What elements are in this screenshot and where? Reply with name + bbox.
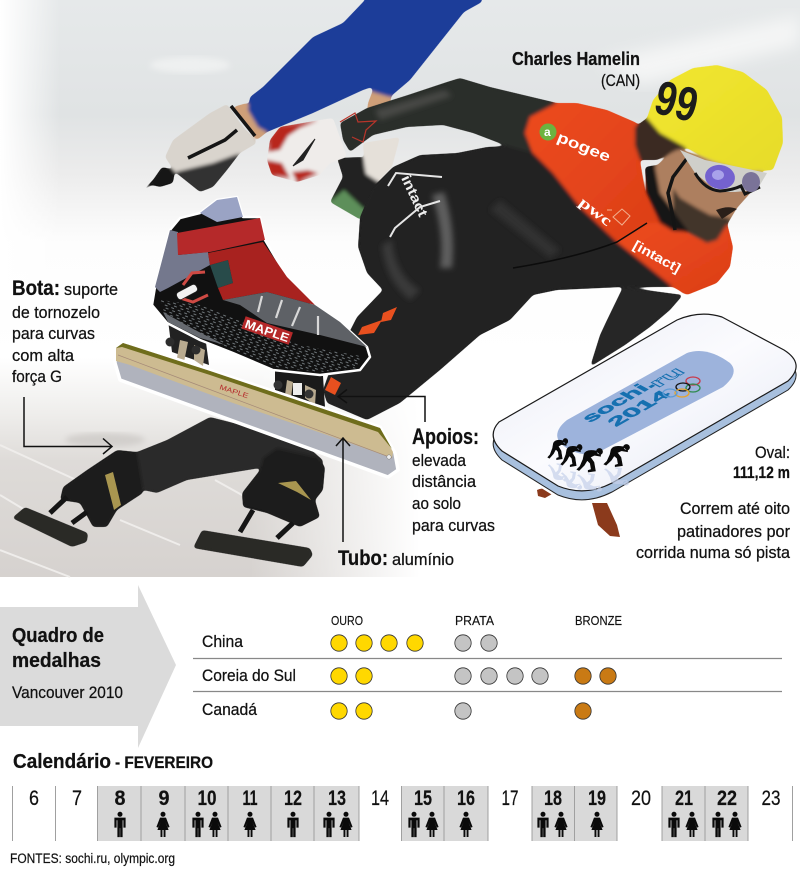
thigh highlights: [375, 90, 560, 300]
text: skaters per race: [636, 499, 791, 562]
sources: FONTES: sochi.ru, olympic.org: [10, 851, 175, 866]
helmet number 99: 99: [650, 71, 703, 133]
country names: China: [202, 632, 243, 651]
Olympic rings: [663, 377, 700, 397]
day numbers: 12: [284, 787, 302, 810]
text: oval length: Oval:: [755, 443, 790, 462]
white boot: [165, 104, 257, 172]
Sochi logo: 2014: [603, 388, 676, 429]
orange lower panel: [617, 223, 733, 295]
rear blade mount: [166, 320, 209, 366]
column headings: PRATA: [455, 613, 494, 628]
maple leaf on sleeve: [340, 113, 376, 142]
sponsor intact thigh: intact: [398, 173, 432, 219]
calendar strip: [12, 786, 792, 841]
gold boot patches: [105, 472, 311, 510]
gray toe top: [223, 292, 367, 347]
column headings: [331, 613, 622, 628]
boot shell: [175, 153, 240, 192]
laces: [258, 296, 318, 335]
column headings: BRONZE: [575, 613, 622, 628]
Sochi logo: [577, 364, 689, 429]
buckle: [175, 272, 208, 302]
nose and mouth: [716, 207, 737, 219]
heading: calendar: Calendário: [13, 751, 111, 773]
arrow: mounts: [338, 390, 425, 422]
day numbers: 14: [371, 787, 389, 810]
inner oval: [557, 351, 734, 454]
day numbers: 18: [544, 787, 562, 810]
hair: [635, 118, 687, 160]
red strap: [177, 218, 265, 255]
goggles: [680, 150, 767, 194]
illustration: speed skate: [115, 197, 398, 477]
left boot: [60, 450, 143, 527]
text: boot: de tornozelo: [12, 303, 100, 322]
neck collar: [645, 165, 690, 232]
column headings: OURO: [331, 613, 363, 628]
sponsor intact chest: [intact]: [631, 238, 683, 276]
text: boot: suporte: [64, 280, 118, 299]
heading: medal table: Vancouver 2010: [12, 683, 123, 702]
lower leg: [137, 417, 325, 493]
rink halo and side: [493, 323, 796, 500]
text: tube: Tubo:: [338, 547, 388, 570]
skater reflections: [548, 463, 629, 492]
red upper: [208, 242, 315, 305]
blade brand: MAPLE: [218, 384, 249, 400]
text: mounts: distância: [412, 472, 477, 491]
day numbers: 16: [457, 787, 475, 810]
torso and thigh: [323, 146, 673, 420]
day numbers: 23: [762, 787, 780, 810]
sponsor apogee: [540, 124, 613, 166]
skater Charles Hamelin in black and orange suit: [323, 65, 783, 420]
ankle skin: [233, 90, 392, 140]
text: mounts: [412, 424, 495, 535]
beard: [673, 188, 730, 243]
text: skaters per race: Correm até oito: [680, 499, 790, 518]
label: athlete name: Charles Hamelin: [512, 49, 640, 69]
medal table: [193, 613, 782, 719]
right blade: [193, 530, 313, 567]
scale texture: [160, 300, 360, 372]
day numbers: 7: [72, 787, 82, 810]
right arm: [590, 287, 683, 367]
helmet: [647, 65, 783, 172]
day numbers: 10: [198, 787, 216, 810]
left blade: [12, 507, 88, 547]
panel: medal table arrow: [0, 585, 176, 748]
lower side gray: [163, 312, 225, 345]
text: mounts: para curvas: [412, 516, 495, 535]
country names: Coreia do Sul: [202, 666, 296, 685]
day numbers: 20: [631, 787, 651, 810]
men and women event icons: [114, 812, 742, 837]
heading: calendar: - FEVEREIRO: [115, 753, 213, 772]
boot body: [152, 197, 370, 375]
sponsor pwc: [576, 195, 630, 230]
far skate under arm: [330, 137, 400, 220]
glove: [267, 118, 347, 182]
day numbers: 21: [675, 787, 693, 810]
heading: calendar: [13, 751, 213, 773]
text: boot: Bota:: [12, 277, 60, 300]
dark window: [210, 260, 233, 288]
text: mounts: Apoios:: [412, 424, 479, 449]
glove mark: [293, 139, 315, 166]
gray tongue: [200, 197, 243, 222]
face: [655, 148, 763, 243]
red suit fragments under rink: [537, 489, 620, 537]
skater silhouettes: [548, 438, 630, 472]
day numbers: 11: [242, 787, 258, 810]
sponsor apogee: a: [544, 125, 551, 139]
chin strap: [668, 157, 688, 230]
silver medals: [455, 635, 548, 719]
Sochi logo: ru: [644, 364, 689, 390]
text: boot: [12, 277, 118, 386]
text: skaters per race: corrida numa só pista: [636, 543, 791, 562]
left arm sleeve: [340, 78, 557, 155]
blue skater leg and white boot: [135, 0, 482, 197]
country names: Canadá: [202, 700, 257, 719]
MAPLE label: MAPLE: [243, 317, 291, 345]
heading: medal table: medalhas: [12, 650, 101, 672]
text: tube: alumínio: [392, 550, 454, 569]
skate struts: [50, 497, 293, 538]
text: boot: para curvas: [12, 324, 95, 343]
text: tube: [338, 547, 454, 570]
illustration: oval rink: [493, 314, 796, 500]
country names: [202, 632, 296, 719]
boot details: [188, 106, 255, 158]
text: oval length: [733, 443, 790, 482]
arrow: boot: [24, 397, 112, 454]
text: skaters per race: patinadores por: [677, 522, 790, 541]
photo background: ice rink and fog: [0, 0, 800, 577]
day numbers: 19: [588, 787, 606, 810]
text: mounts: elevada: [412, 451, 466, 470]
sponsor pwc: pwc: [576, 195, 615, 230]
rink surface: [493, 314, 796, 491]
text: boot: força G: [12, 367, 62, 386]
day numbers: 17: [502, 787, 518, 810]
day numbers: 15: [414, 787, 432, 810]
lower legs and photo skates: [12, 417, 325, 567]
right boot: [242, 448, 325, 527]
Sochi logo: sochi.: [577, 378, 660, 425]
day numbers: 13: [328, 787, 346, 810]
text: boot: com alta: [12, 346, 75, 365]
label: athlete name: [512, 49, 640, 90]
orange chevrons on thigh: [325, 307, 397, 395]
arrow: tube: [336, 438, 350, 542]
day numbers: 9: [158, 787, 170, 810]
heading: medal table: [12, 625, 123, 702]
heading: medal table: Quadro de: [12, 625, 104, 647]
gray upper: [155, 230, 210, 292]
day numbers: 6: [29, 787, 39, 810]
skate blade tip: [135, 167, 175, 197]
bronze medals: [575, 668, 616, 719]
day numbers: [29, 787, 780, 810]
blade: [115, 342, 398, 477]
suit shapes: [323, 65, 783, 420]
day numbers: 22: [717, 787, 737, 810]
orange chest panel: [525, 103, 660, 242]
sponsor apogee: pogee: [555, 129, 613, 166]
label: athlete name: (CAN): [601, 71, 640, 90]
competition day shading: [98, 786, 748, 841]
gold medals: [331, 635, 423, 719]
text: mounts: ao solo: [412, 494, 461, 513]
day numbers: 8: [114, 787, 126, 810]
front blade mount: [274, 370, 325, 407]
blue leg: [248, 0, 482, 132]
sponsor intact thigh: [388, 173, 442, 237]
seam: [513, 223, 647, 268]
